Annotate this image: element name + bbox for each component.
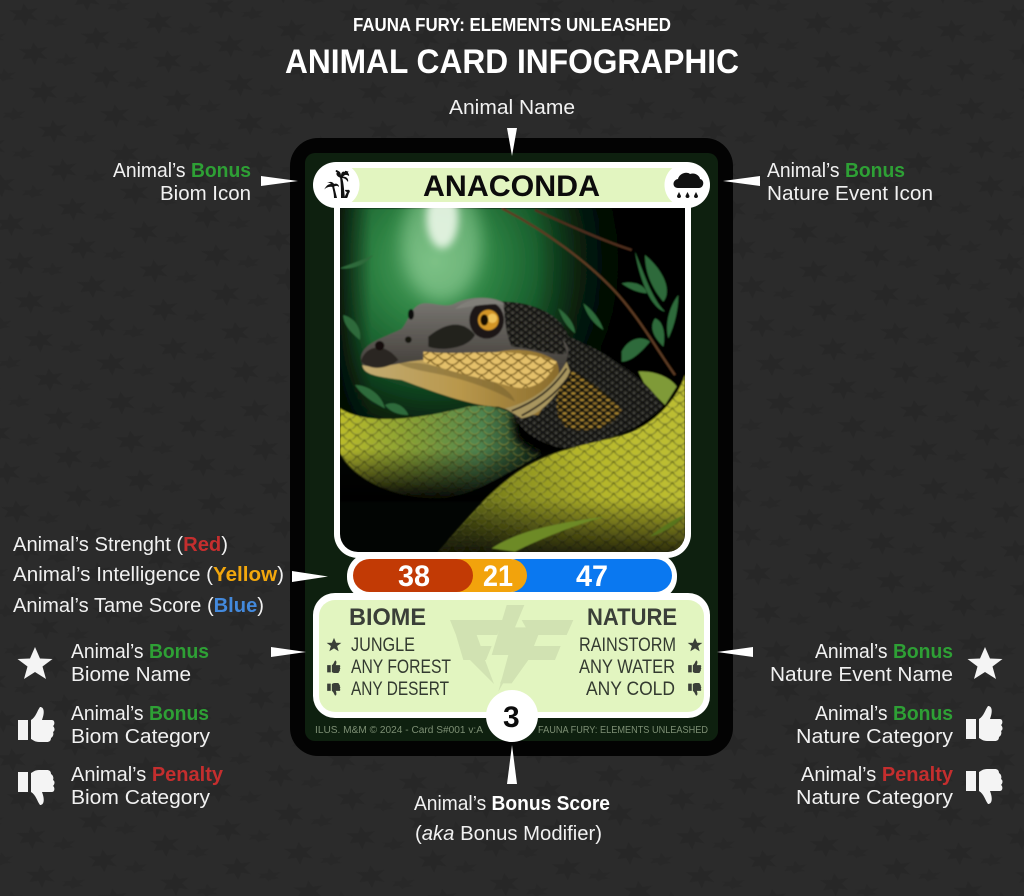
label: bonus biome icon — [113, 160, 251, 205]
label: bonus nature category: Animal’s Bonus — [815, 703, 953, 725]
arrow: bonus score — [507, 745, 517, 784]
biome icon circle — [314, 162, 360, 208]
biome list — [351, 635, 451, 700]
neck shadow — [512, 412, 568, 455]
label: bonus nature category: Nature Category — [796, 726, 953, 748]
nature icon circle — [664, 162, 710, 208]
title — [285, 15, 739, 81]
arrow: nature list — [717, 647, 753, 657]
jaw — [362, 350, 559, 415]
arrow: stats — [292, 571, 328, 582]
label: bonus nature event icon: Nature Event Icon — [767, 183, 933, 205]
label: bonus score: Animal’s Bonus Score — [414, 793, 610, 815]
illustration frame — [334, 200, 691, 558]
icon: thumbs down right — [966, 769, 1002, 804]
label: bonus biome name: Biome Name — [71, 664, 191, 686]
bonus score badge — [486, 690, 538, 742]
front coil — [437, 375, 685, 553]
animal card — [290, 138, 733, 756]
label: bonus biome name — [71, 641, 209, 686]
label: penalty biome category: Animal’s Penalty — [71, 764, 224, 786]
label: penalty biome category: Biom Category — [71, 787, 210, 809]
biome list: ANY FOREST — [351, 657, 451, 678]
arrow: biome list — [271, 647, 306, 657]
tame value: 47 — [576, 560, 608, 593]
footer credit: ILUS. M&M © 2024 - Card S#001 v:A — [315, 725, 483, 736]
eye — [469, 301, 504, 339]
bonus score badge: 3 — [503, 701, 520, 734]
neck — [495, 302, 663, 448]
back coil left — [340, 406, 542, 499]
biome icons — [327, 638, 341, 696]
biome list: ANY DESERT — [351, 679, 449, 700]
title: FAUNA FURY: ELEMENTS UNLEASHED — [353, 15, 671, 35]
icon: thumbs up right — [966, 706, 1002, 741]
label: bonus nature event name: Animal’s Bonus — [815, 641, 953, 663]
nostrils — [375, 341, 384, 350]
head scales dark — [428, 325, 475, 349]
nature list: RAINSTORM — [579, 635, 676, 656]
icon: palm trees — [324, 170, 350, 198]
nature heading: NATURE — [587, 604, 677, 631]
info panel — [313, 593, 710, 718]
label: bonus nature event name: Nature Event Name — [770, 664, 953, 686]
arrow: bonus nature event icon — [723, 176, 760, 186]
label: penalty nature category: Animal’s Penalty — [801, 764, 954, 786]
nature list — [579, 635, 676, 700]
stats bar — [347, 553, 677, 600]
label: bonus biome category: Animal’s Bonus — [71, 703, 209, 725]
label: penalty biome category — [71, 764, 224, 809]
gold scales — [423, 352, 557, 388]
snout — [361, 348, 398, 368]
label: bonus score: (aka Bonus Modifier) — [415, 823, 602, 845]
card background — [305, 153, 718, 741]
tame score — [500, 559, 672, 592]
name plate — [350, 168, 673, 202]
intelligence value: 21 — [483, 560, 513, 593]
label: bonus nature category — [796, 703, 953, 748]
watermark logo — [450, 605, 573, 692]
footer game name: FAUNA FURY: ELEMENTS UNLEASHED — [538, 725, 708, 736]
nature list: ANY COLD — [586, 679, 675, 700]
label: bonus biome category — [71, 703, 210, 748]
label: bonus biome icon: Animal’s Bonus — [113, 160, 251, 182]
icon: rain cloud — [674, 173, 703, 198]
label: bonus nature event icon: Animal’s Bonus — [767, 160, 905, 182]
label: bonus nature event icon — [767, 160, 933, 205]
back coil right — [638, 371, 677, 405]
nature icons — [688, 638, 702, 696]
title bar — [313, 162, 710, 208]
biome list: JUNGLE — [351, 635, 415, 656]
arrow: animal name — [507, 128, 517, 156]
label: animal name: Animal Name — [449, 97, 575, 119]
legend: stats: Animal’s Tame Score (Blue) — [13, 595, 264, 617]
label: bonus biome name: Animal’s Bonus — [71, 641, 209, 663]
card border — [290, 138, 733, 756]
head — [361, 298, 568, 409]
legend: stats — [13, 534, 284, 617]
icon: thumbs up left — [18, 707, 54, 742]
legend: stats: Animal’s Strenght (Red) — [13, 534, 228, 556]
title: ANIMAL CARD INFOGRAPHIC — [285, 43, 739, 81]
label: bonus biome icon: Biom Icon — [160, 183, 251, 205]
intelligence — [440, 559, 527, 592]
biome heading: BIOME — [349, 604, 426, 631]
icon: thumbs down left — [18, 770, 54, 805]
label: penalty nature category: Nature Category — [796, 787, 953, 809]
label: bonus nature event name — [770, 641, 953, 686]
strength — [353, 559, 473, 592]
jaw shadow line — [398, 363, 515, 402]
illustration: anaconda — [340, 182, 685, 553]
collar stripes — [505, 362, 570, 418]
label: bonus biome category: Biom Category — [71, 726, 210, 748]
animal name: ANACONDA — [423, 170, 600, 203]
icon: star left — [18, 647, 52, 679]
label: bonus score — [414, 793, 610, 845]
strength value: 38 — [398, 560, 430, 593]
label: penalty nature category — [796, 764, 954, 809]
arrow: bonus biome icon — [261, 176, 298, 186]
legend: stats: Animal’s Intelligence ( Yellow) — [13, 564, 284, 586]
icon: star right — [968, 647, 1002, 679]
nature list: ANY WATER — [579, 657, 675, 678]
neck gold scales — [557, 368, 622, 430]
